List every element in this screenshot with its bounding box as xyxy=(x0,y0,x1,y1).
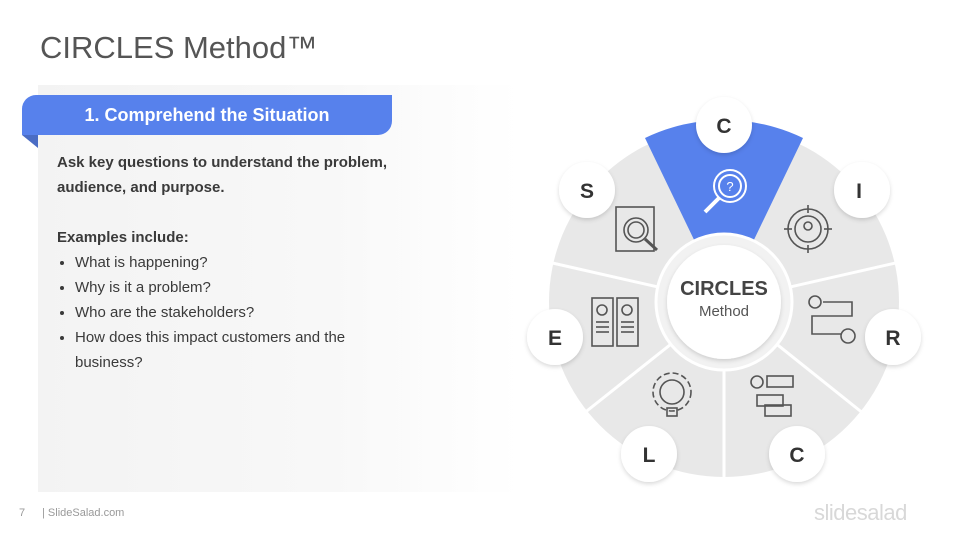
text block: Who are the stakeholders? xyxy=(75,304,254,321)
text block: Ask key questions to understand the problem, audience, and purpose. xyxy=(57,154,387,196)
wheel background xyxy=(548,127,900,480)
center circle xyxy=(667,245,781,359)
text block: What is happening? xyxy=(75,254,208,271)
footer page number: 7 xyxy=(19,507,25,519)
icon: document inspect xyxy=(616,207,657,251)
icon: target people xyxy=(784,205,832,253)
panel: background xyxy=(38,85,520,492)
header fold xyxy=(22,135,38,148)
center circle: Method xyxy=(699,303,749,320)
icon: numbered steps xyxy=(751,376,793,416)
letter circles: L xyxy=(643,444,656,467)
panel header: 1. Comprehend the Situation xyxy=(84,105,330,125)
letter circles: I xyxy=(856,180,862,203)
letter circles: C xyxy=(789,444,805,467)
blue segment xyxy=(645,120,803,302)
icon: magnifier question xyxy=(705,170,746,212)
text block: Examples include: xyxy=(57,229,189,246)
icon: flow process xyxy=(809,296,855,343)
title: CIRCLES Method™ xyxy=(40,30,317,65)
center ring xyxy=(656,234,792,370)
panel header xyxy=(22,95,392,135)
logo: slidesalad xyxy=(814,500,907,525)
text block xyxy=(57,154,387,371)
letter circles: S xyxy=(580,180,594,203)
letter circles xyxy=(527,97,921,482)
icon: comparison cards xyxy=(592,298,638,346)
letter circles: R xyxy=(885,327,901,350)
icon: gear bulb xyxy=(653,373,691,416)
icon: magnifier question: ? xyxy=(726,179,734,194)
letter circles: C xyxy=(716,115,732,138)
center circle: CIRCLES xyxy=(680,278,768,300)
letter circles: E xyxy=(548,327,562,350)
text block: How does this impact customers and the business? xyxy=(75,329,345,371)
footer source: | SlideSalad.com xyxy=(42,507,124,519)
text block: Why is it a problem? xyxy=(75,279,211,296)
